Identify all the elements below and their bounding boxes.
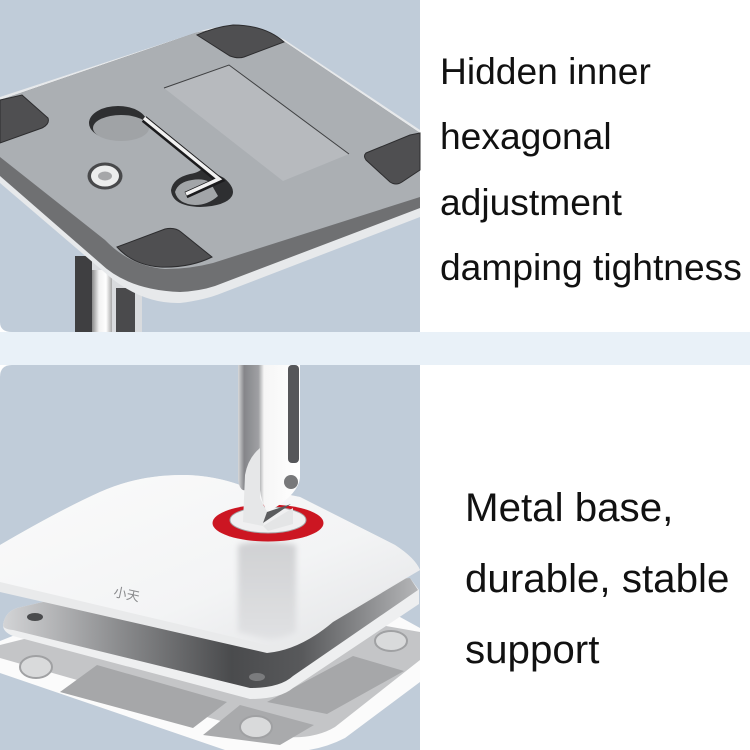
caption: hidden hexagonal adjustment: adjustment [440,181,623,223]
hex key [144,118,219,195]
stand base underside [0,26,420,303]
red ring [212,504,324,542]
caption: hidden hexagonal adjustment: hexagonal [440,115,612,157]
stand arm with hinge [238,365,300,531]
panel: hex adjustment photo [0,0,420,332]
rubber pad: right [364,133,420,184]
logo mark: 小天 [112,584,141,604]
hex screw [88,162,122,190]
white top plate [0,475,420,653]
caption: hidden hexagonal adjustment: Hidden inner [440,50,651,92]
panel: metal base photo [0,365,420,750]
tray standoffs [20,631,407,738]
rubber pad: top [197,25,284,58]
caption: hidden hexagonal adjustment: damping tightness [440,246,742,288]
plastic bottom tray [0,617,420,750]
caption: hidden hexagonal adjustment [440,50,742,288]
background strip [0,332,750,365]
hex key slot upper [89,106,149,141]
stand pole [75,256,142,332]
hex key slot lower [171,167,233,207]
metal plate [3,578,419,699]
rubber pad: left [0,95,48,143]
caption: metal base: durable, stable [465,556,729,601]
rubber pad: bottom [117,228,212,267]
caption: metal base: Metal base, [465,485,673,530]
caption: metal base: support [465,627,599,672]
access panel [164,65,349,181]
caption: metal base [465,485,729,672]
